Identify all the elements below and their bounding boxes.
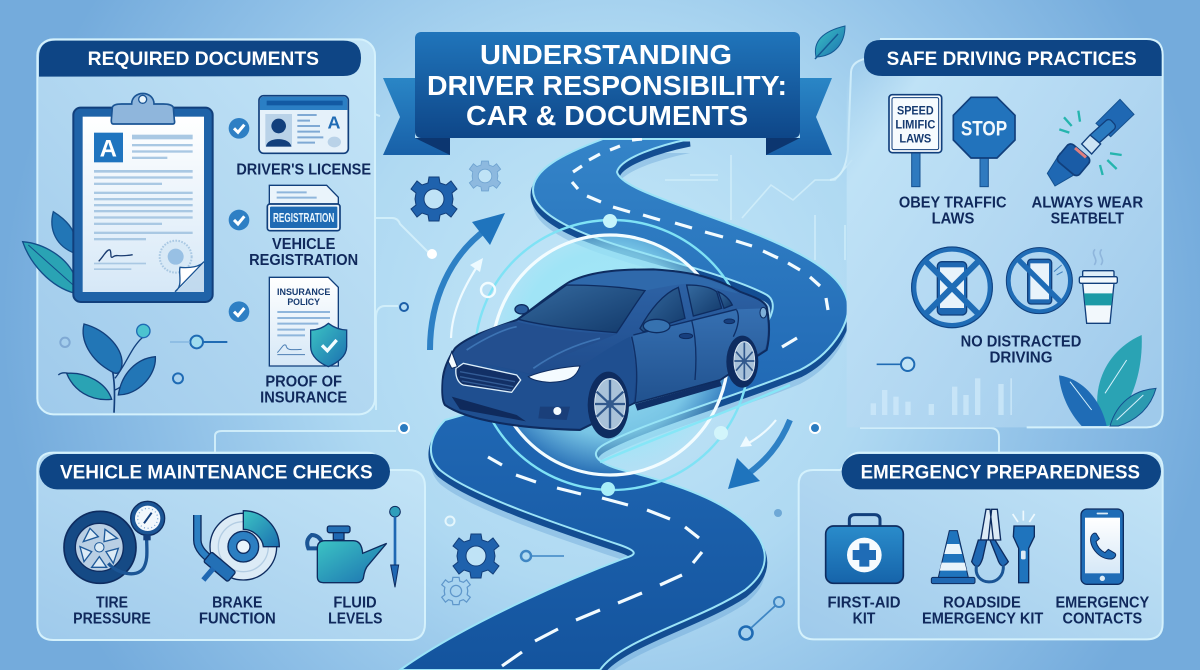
car side panels [633,308,768,402]
icon: plant [58,324,227,413]
label: brake function: BRAKE [212,594,262,611]
checkmarks [229,118,249,322]
icon: insurance policy: INSURANCE [277,287,330,297]
hood [455,322,617,373]
arrow: up-curving left [430,213,505,350]
icon: no phone crossed [912,247,992,328]
label: tire pressure: TIRE [96,594,128,611]
small nodes around lower road [446,509,784,640]
icon: roadside kit [931,509,1035,584]
winding road [400,139,848,670]
label: obey traffic laws: OBEY TRAFFIC [899,194,1006,211]
icon: no phone slash [1006,248,1072,314]
icon: leaves behind clipboard [23,212,75,293]
label: first-aid kit: KIT [853,610,876,627]
icon: brake disc [197,511,279,582]
label: roadside emergency kit [922,594,1044,627]
label: no distracted driving: DRIVING [989,350,1052,367]
icon: insurance policy: POLICY [287,297,320,307]
label: obey traffic laws: LAWS [932,210,974,227]
label: emergency contacts: CONTACTS [1062,610,1142,627]
door lines and details [632,309,738,403]
label: always wear seatbelt: ALWAYS WEAR [1031,194,1143,211]
heading: vehicle maintenance checks: VEHICLE MAINTENANCE CHECKS [60,462,373,483]
panel: safe driving practices [847,39,1163,427]
gears [411,161,501,605]
label: brake function: FUNCTION [199,610,276,627]
label: always wear seatbelt: SEATBELT [1051,210,1125,227]
label: proof of insurance: PROOF OF [265,374,342,391]
label: fluid levels: FLUID [333,594,377,611]
label: vehicle registration: VEHICLE [272,236,335,253]
icon: driver's license card: A [327,112,340,132]
panel: required documents [23,39,375,414]
label: proof of insurance [260,374,347,407]
label: proof of insurance: INSURANCE [260,390,347,407]
panel: emergency preparedness [799,453,1163,639]
faint chart lines [665,155,885,260]
small teal leaf [815,26,845,59]
heading: safe driving practices: SAFE DRIVING PRACTICES [887,49,1137,70]
icon: speed limit sign: LAWS [899,132,931,146]
icon: clipboard with document: A [100,136,117,163]
icon: fluid can and dipstick [307,506,400,587]
roof [567,271,738,293]
icon: decorative leaves [1059,335,1156,426]
label: emergency contacts [1055,594,1149,627]
label: vehicle registration [249,236,358,269]
label: roadside emergency kit: ROADSIDE [943,594,1021,611]
icon: registration plate: REGISTRATION [273,211,334,225]
label: fluid levels [328,594,382,627]
title text: UNDERSTANDING [480,39,732,70]
icon: clipboard with document [73,93,213,302]
icon: coffee cup [1079,249,1117,323]
label: tire pressure: PRESSURE [73,610,151,627]
icon: stop sign: STOP [961,116,1007,140]
label: always wear seatbelt [1031,194,1143,227]
grille [456,363,521,392]
car body [442,269,769,430]
title text: CAR & DOCUMENTS [466,100,748,131]
icon: first-aid kit [826,515,903,583]
label: tire pressure [73,594,151,627]
heading: safe driving practices [864,40,1162,76]
icon: tire pressure gauge [64,501,165,583]
windows [518,285,732,333]
icon: speed limit sign [889,95,942,187]
heading: required documents: REQUIRED DOCUMENTS [88,49,319,70]
lower vent [452,397,526,421]
title text: DRIVER RESPONSIBILITY: [427,70,787,101]
label: first-aid kit: FIRST-AID [827,594,900,611]
icon: driver's license card [259,96,348,153]
arrow: down-curving right [728,420,790,489]
title banner [383,32,832,155]
label: roadside emergency kit: EMERGENCY KIT [922,610,1044,627]
label: fluid levels: LEVELS [328,610,382,627]
label: first-aid kit [827,594,900,627]
car [442,269,769,438]
label: vehicle registration: REGISTRATION [249,252,358,269]
heading: required documents [39,41,361,77]
wheels [588,372,629,438]
label: no distracted driving [961,334,1081,367]
front fascia [443,337,635,429]
heading: emergency preparedness: EMERGENCY PREPAREDNESS [861,462,1140,483]
icon: speed limit sign: LIMIFIC [895,118,935,132]
headlights [528,366,580,382]
node ring [877,358,914,371]
label: no distracted driving: NO DISTRACTED [961,334,1081,351]
icon: phone [1081,509,1123,584]
panel: vehicle maintenance checks [37,453,425,640]
title text [427,39,787,131]
label: driver's license: DRIVER'S LICENSE [236,161,371,178]
label: emergency contacts: EMERGENCY [1055,594,1149,611]
icon: registration plate [267,185,340,231]
icon: speed limit sign: SPEED [897,104,934,118]
label: brake function [199,594,276,627]
faint bars [871,378,1012,415]
connector lines and decorative nodes [215,58,999,453]
heading: emergency preparedness [842,454,1161,489]
heading: vehicle maintenance checks [39,454,390,489]
icon: insurance policy [269,277,347,367]
glow rings around car [475,214,790,496]
icon: stop sign [953,97,1015,187]
icon: seatbelt [1047,99,1134,186]
label: obey traffic laws [899,194,1006,227]
